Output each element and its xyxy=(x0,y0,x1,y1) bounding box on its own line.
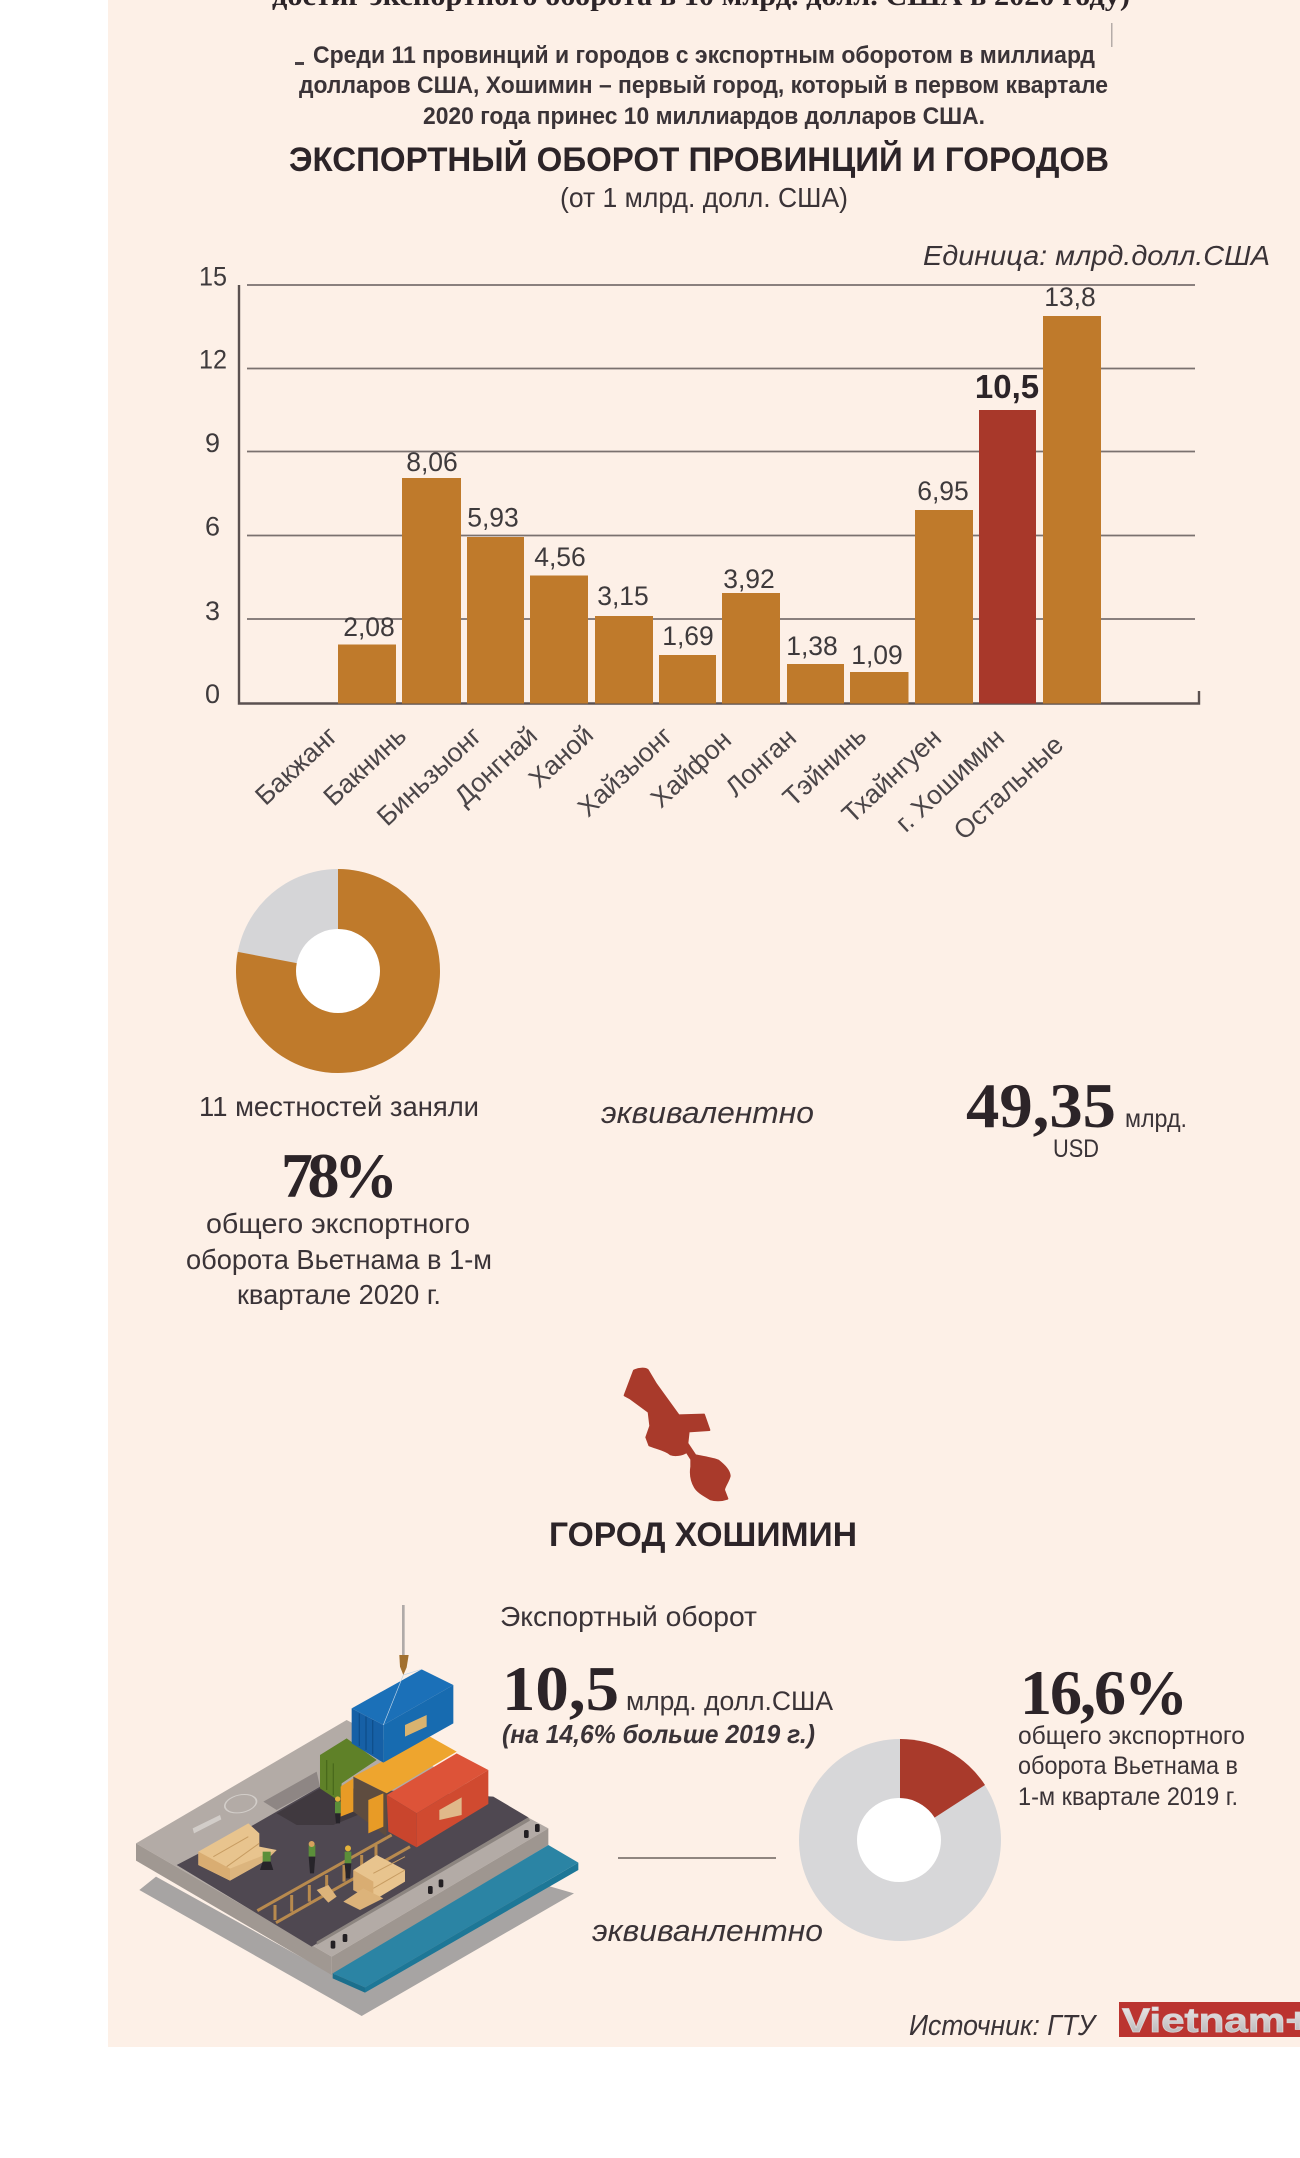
category labels: Донгнай xyxy=(448,720,543,812)
platform shadow xyxy=(139,1877,574,2016)
category labels: Бакнинь xyxy=(317,720,412,812)
y axis labels: 15 xyxy=(199,262,227,292)
water strip xyxy=(333,1845,578,1993)
y axis labels xyxy=(199,262,227,709)
value labels: 1,38 xyxy=(786,631,838,661)
category labels: Остальные xyxy=(948,729,1069,846)
equivalent label: эквивалентно xyxy=(601,1095,814,1130)
unit note: Единица: млрд.долл.США xyxy=(923,240,1270,271)
y axis labels: 3 xyxy=(205,596,220,626)
y axis labels: 6 xyxy=(205,512,220,542)
stat: 49,35 billion USD: USD xyxy=(1053,1135,1099,1163)
quay platform xyxy=(136,1720,548,1975)
ladder rails xyxy=(257,1835,410,1923)
y axis labels: 9 xyxy=(205,428,220,458)
chart heading xyxy=(289,140,1109,213)
text block: 78 percent: 11 местностей заняли xyxy=(199,1091,479,1122)
category labels: Хайзыонг xyxy=(572,720,678,822)
category labels: Бакжанг xyxy=(249,720,343,811)
stat: 49,35 billion USD: 49,35 xyxy=(966,1070,1116,1141)
intro text block xyxy=(295,23,1112,130)
bars xyxy=(338,316,1101,704)
blue container xyxy=(352,1669,453,1763)
text block: 78 percent: квартале 2020 г. xyxy=(237,1279,441,1310)
value labels xyxy=(343,282,1096,670)
value labels: 1,09 xyxy=(851,640,903,670)
stat: 49,35 billion USD: млрд. xyxy=(1125,1105,1187,1133)
intro text block: Среди 11 провинций и городов с экспортным оборотом в миллиард xyxy=(313,42,1095,69)
donut: 78 percent xyxy=(236,869,440,1073)
stat: export turnover: 10,5 xyxy=(502,1653,619,1724)
value labels: 5,93 xyxy=(467,502,519,532)
equivalent label 2: эквиванлентно xyxy=(592,1913,823,1948)
workers xyxy=(260,1796,351,1878)
text block: 16.6 percent xyxy=(1018,1657,1245,1811)
green container xyxy=(320,1738,377,1802)
red container xyxy=(387,1753,488,1847)
stat: export turnover: млрд. долл.США xyxy=(626,1686,833,1716)
chart heading: (от 1 млрд. долл. США) xyxy=(560,182,848,213)
value labels: 10,5 xyxy=(975,368,1039,405)
value labels: 13,8 xyxy=(1044,282,1096,312)
stat: 49,35 billion USD xyxy=(966,1070,1187,1163)
text block: 78 percent: оборота Вьетнама в 1-м xyxy=(186,1244,492,1275)
logo: Vietnam+: Vietnam+ xyxy=(1122,2002,1300,2040)
value labels: 8,06 xyxy=(406,447,458,477)
category labels: Тхайнгуен xyxy=(836,722,947,829)
city heading: ГОРОД ХОШИМИН xyxy=(549,1516,857,1554)
text block: 78 percent: 78% xyxy=(281,1140,398,1211)
category labels: Биньзыонг xyxy=(371,720,487,832)
connector line xyxy=(618,1857,776,1859)
cargo boxes xyxy=(198,1823,405,1910)
value labels: 3,15 xyxy=(597,581,649,611)
text block: 16.6 percent: 1-м квартале 2019 г. xyxy=(1018,1783,1238,1811)
value labels: 2,08 xyxy=(343,612,395,642)
donut: 16.6 percent xyxy=(799,1739,1001,1941)
asphalt yard xyxy=(177,1772,530,1947)
bollards xyxy=(331,1824,540,1949)
value labels: 6,95 xyxy=(917,476,969,506)
bar chart xyxy=(199,262,1199,846)
text block: 16.6 percent: общего экспортного xyxy=(1018,1722,1245,1750)
intro text block: 2020 года принес 10 миллиардов долларов США. xyxy=(423,103,985,130)
intro text block: долларов США, Хошимин – первый город, который в первом квартале xyxy=(299,72,1108,99)
stat: export turnover xyxy=(500,1601,833,1749)
text block: 16.6 percent: 16,6% xyxy=(1020,1657,1188,1728)
source credit: Источник: ГТУ xyxy=(909,2010,1097,2042)
orange container xyxy=(341,1737,457,1837)
illustration: container port xyxy=(136,1605,578,2016)
value labels: 4,56 xyxy=(534,542,586,572)
value labels: 1,69 xyxy=(662,621,714,651)
chart heading: ЭКСПОРТНЫЙ ОБОРОТ ПРОВИНЦИЙ И ГОРОДОВ xyxy=(289,140,1109,179)
y axis labels: 12 xyxy=(199,344,227,374)
value labels: 3,92 xyxy=(723,564,775,594)
category labels xyxy=(249,719,1069,846)
category labels: Хайфон xyxy=(645,724,737,814)
crane rope and hook xyxy=(399,1605,409,1675)
road markings xyxy=(193,1795,260,1833)
text block: 78 percent: общего экспортного xyxy=(206,1208,470,1239)
stat: export turnover: (на 14,6% больше 2019 г.) xyxy=(502,1719,815,1749)
category labels: Лонган xyxy=(719,722,802,803)
text block: 78 percent xyxy=(186,1091,492,1310)
category labels: Ханой xyxy=(523,719,599,794)
y axis labels: 0 xyxy=(205,679,220,709)
category labels: г. Хошимин xyxy=(889,722,1010,838)
stat: export turnover: Экспортный оборот xyxy=(500,1601,757,1632)
icon: Ho Chi Minh City map xyxy=(625,1369,730,1500)
text block: 16.6 percent: оборота Вьетнама в xyxy=(1018,1752,1238,1780)
category labels: Тэйнинь xyxy=(777,720,872,812)
